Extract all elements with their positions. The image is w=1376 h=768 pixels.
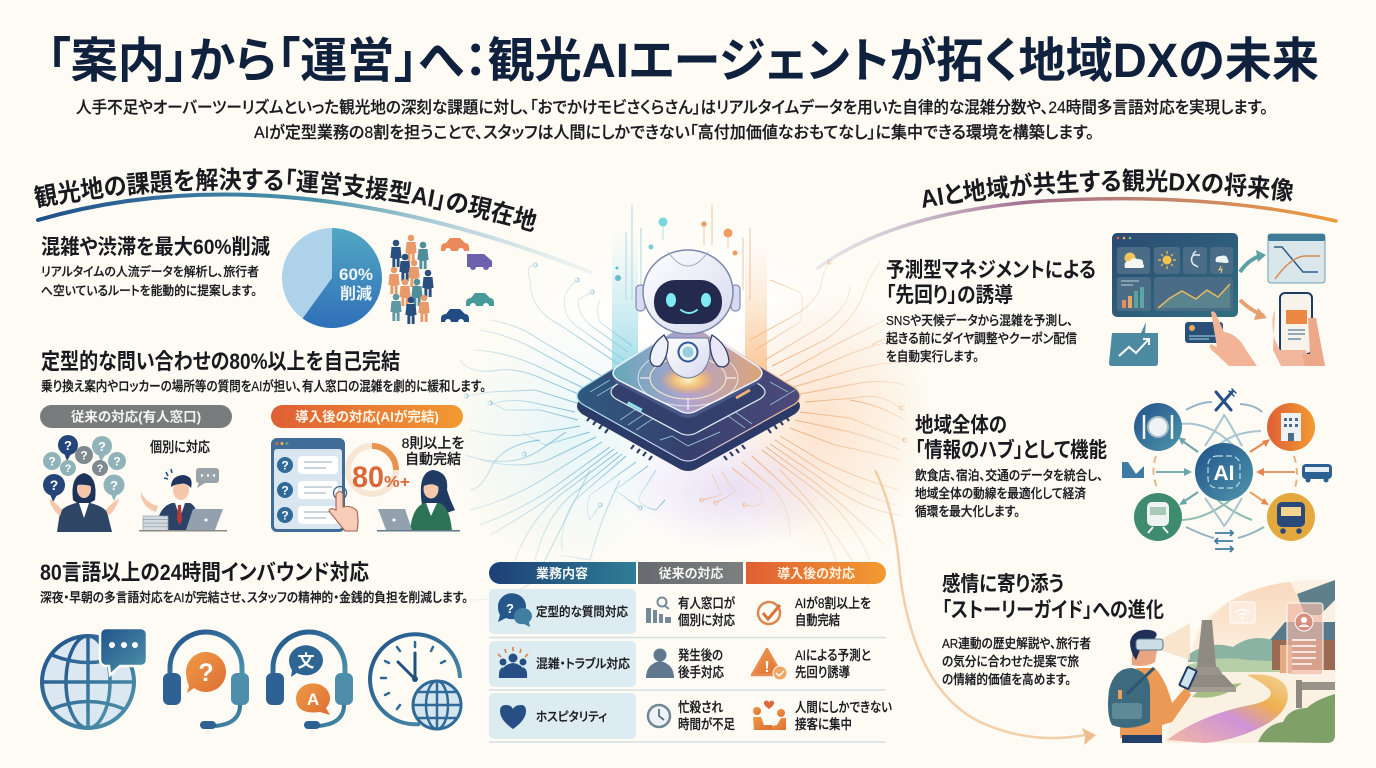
illustration: clerk with laptop [139, 468, 227, 532]
table row 2 [489, 641, 871, 687]
table row 3 [489, 693, 892, 739]
predictive description: SNSや天候データから混雑を予測し、 [886, 313, 1073, 328]
table row 3: ホスピタリティ [536, 710, 607, 724]
arrows from dashboard [1240, 250, 1267, 320]
icons: vehicles [441, 238, 494, 325]
circuit lines right [700, 260, 908, 590]
comparison table [489, 562, 892, 742]
illustration: question bubbles and clerk: ? [65, 463, 72, 475]
panel: story guide [875, 470, 1335, 745]
congestion description: へ空いているルートを能動的に提案します。 [41, 283, 257, 298]
label: 80 percent automated [402, 435, 464, 467]
illustration: question bubbles and clerk: ? [98, 439, 106, 454]
table row 2: 後手対応 [678, 664, 724, 680]
icon: headset with translation: A [307, 690, 319, 709]
icon: clock with globe [370, 634, 461, 729]
pie chart 60 percent: 60% [339, 265, 373, 284]
illustration: AI chat window: ? [281, 484, 289, 498]
table row 2: ! [764, 659, 770, 676]
arrow to story guide [875, 470, 1096, 745]
illustration: question bubbles and clerk: ? [80, 448, 88, 462]
heading: left curved section title [34, 167, 592, 274]
table header [489, 562, 886, 584]
illustration: question bubbles and clerk: ? [97, 463, 104, 475]
title: 「案内」から「運営」へ：観光AIエージェントが拓く地域DXの未来 [47, 35, 1319, 88]
table header: 従来の対応 [659, 566, 723, 581]
table row 1: 個別に対応 [678, 613, 735, 628]
table header: 導入後の対応 [777, 566, 855, 581]
circuit lines left [460, 263, 665, 600]
multilingual description: 深夜・早朝の多言語対応をAIが完結させ、スタッフの精神的・金銭的負担を削減します。 [40, 590, 468, 605]
illustration: AR scene with traveler [1108, 580, 1335, 743]
ring chart 80 percent plus: 80 [352, 461, 384, 494]
panel: information hub [915, 389, 1332, 552]
table row 1: 定型的な質問対応 [536, 604, 628, 619]
icon: headset with question [163, 632, 249, 729]
illustration: question bubbles and clerk: ? [50, 477, 58, 493]
illustration: question bubbles and clerk [43, 435, 126, 532]
icon: globe with speech bubble [42, 628, 147, 728]
illustration: question bubbles and clerk: ? [64, 438, 72, 453]
diagram: AI hub network: AI [1214, 462, 1234, 485]
illustration: question bubbles and clerk: ? [48, 454, 56, 468]
table row 2: AIによる予測と [795, 648, 871, 663]
illustration: trend card [1109, 322, 1158, 366]
multilingual heading: 80言語以上の24時間インバウンド対応 [40, 560, 369, 585]
heading: left curved section title: 観光地の課題を解決する「運営支援型AI」の現在地 [34, 167, 537, 232]
story description: の情緒的価値を高めます。 [942, 672, 1071, 687]
ring chart 80 percent plus: %+ [384, 474, 410, 491]
heading: right curved section title: AIと地域が共生する観光DXの将来像 [922, 168, 1293, 208]
table row 2: 先回り誘導 [795, 664, 850, 680]
intro text: 人手不足やオーバーツーリズムといった観光地の深刻な課題に対し、「おでかけモビさくらさん」はリアルタイムデータを用いた自律的な混雑分数や、24時間多言語対応を実現します。 [76, 97, 1268, 117]
illustration: forecast chart card [1268, 234, 1325, 283]
predictive description: 起きる前にダイヤ調整やクーポン配信 [886, 331, 1077, 346]
story description: の気分に合わせた提案で旅 [942, 654, 1079, 669]
panel: 24 hour multilingual [40, 560, 468, 729]
intro text [76, 97, 1268, 142]
pill: conventional: 従来の対応(有人窓口) [71, 408, 201, 424]
table row 1: 有人窓口が [678, 595, 736, 611]
predictive heading [886, 259, 1096, 307]
panel: predictive management [886, 233, 1325, 366]
panel: self-resolution of inquiries [40, 349, 486, 532]
heading: right curved section title [816, 168, 1338, 270]
icon: headset with translation: 文 [298, 652, 314, 671]
story heading [942, 572, 1164, 622]
story description: AR連動の歴史解説や、旅行者 [942, 636, 1091, 651]
table header: 業務内容 [536, 566, 588, 581]
table row 3: 人間にしかできない [795, 700, 892, 715]
icon: headset with translation [266, 632, 353, 729]
base chip [577, 325, 800, 471]
pill: conventional [40, 405, 232, 428]
illustration: dashboard [1112, 233, 1238, 317]
icon: headset with question: ? [198, 659, 214, 687]
predictive heading: 予測型マネジメントによる [886, 259, 1096, 282]
predictive heading: 「先回り」の誘導 [886, 284, 1013, 307]
hub description: 飲食店、宿泊、交通のデータを統合し、 [915, 468, 1103, 483]
pill: after introduction [271, 405, 463, 428]
congestion description: リアルタイムの人流データを解析し、旅行者 [41, 264, 259, 279]
hub heading: 地域全体の [915, 414, 1007, 437]
congestion heading: 混雑や渋滞を最大60%削減 [41, 235, 270, 259]
illustration: question bubbles and clerk: ? [110, 478, 118, 493]
table row 3: 時間が不足 [678, 716, 735, 732]
predictive description [886, 313, 1077, 364]
illustration: clerk in green [377, 470, 460, 532]
label: 80 percent automated: 8則以上を [402, 435, 464, 451]
congestion description [41, 264, 259, 298]
story description [942, 636, 1091, 687]
inquiry description: 乗り換え案内やロッカーの場所等の質問をAIが担い、有人窓口の混雑を劇的に緩和します。 [41, 378, 486, 394]
label: individual handling: 個別に対応 [150, 439, 210, 455]
hub heading [915, 414, 1107, 462]
story heading: 「ストーリーガイド」への進化 [942, 599, 1164, 622]
label: 80 percent automated: 自動完結 [405, 451, 461, 467]
hub description: 地域全体の動線を最適化して経済 [915, 486, 1086, 501]
center: chip platform and robot [577, 205, 800, 471]
story heading: 感情に寄り添う [942, 572, 1064, 596]
table row 3: 接客に集中 [795, 716, 852, 732]
icons: crowd of people [388, 235, 434, 324]
diagram: AI hub network [1122, 389, 1332, 552]
mid and top plates [611, 326, 765, 435]
table row 3: 忙殺され [678, 700, 724, 715]
ring chart 80 percent plus [348, 446, 410, 494]
inquiry heading: 定型的な問い合わせの80%以上を自己完結 [41, 349, 400, 374]
hub description: 循環を最大化します。 [915, 504, 1020, 519]
table row 1 [489, 589, 871, 634]
table row 1: 自動完結 [795, 613, 840, 628]
table row 1: AIが8割以上を [795, 595, 871, 611]
illustration: AI chat window: ? [281, 508, 289, 522]
holographic beams [612, 205, 767, 380]
illustration: AI chat window: ? [281, 458, 289, 472]
intro text: AIが定型業務の8割を担うことで、スタッフは人間にしかできない「高付加価値なおもてなし」に集中できる環境を構築します。 [254, 122, 1094, 142]
hub heading: 「情報のハブ」として機能 [915, 438, 1107, 462]
hub description [915, 468, 1103, 519]
pie chart 60 percent [282, 228, 382, 328]
illustration: question bubbles and clerk: ? [113, 454, 121, 468]
icon: pointing hand [329, 486, 358, 531]
illustration: AI chat window [271, 438, 345, 532]
robot [636, 250, 740, 378]
pill: after introduction: 導入後の対応(AIが完結) [295, 408, 439, 424]
predictive description: を自動実行します。 [886, 349, 979, 364]
illustration: smartphone [1272, 293, 1325, 366]
illustration: coupon and hand [1185, 311, 1257, 366]
table row 1: ? [506, 601, 514, 616]
table row 2: 混雑・トラブル対応 [536, 656, 630, 671]
pie chart 60 percent: 削減 [340, 285, 372, 303]
table row 2: 発生後の [678, 648, 723, 663]
panel: congestion reduction [41, 228, 494, 328]
